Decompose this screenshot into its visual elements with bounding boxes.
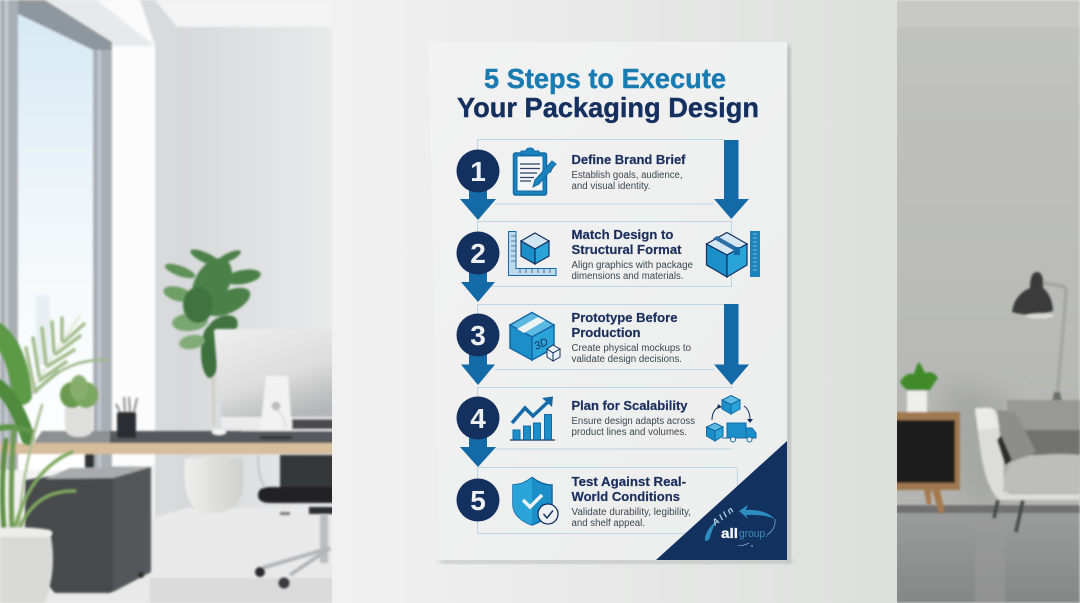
- floor lamp: [1012, 272, 1066, 402]
- icon: clipboard and pen: [514, 148, 556, 195]
- text: step 1: Define Brand Brief: [572, 152, 686, 167]
- window: [0, 0, 112, 470]
- arrow: step 2 down: [461, 270, 495, 302]
- desk with monitor and accessories: [0, 329, 334, 593]
- arrow: step 4 down: [460, 435, 496, 467]
- step number 4: [456, 396, 500, 440]
- corner triangle with logo: [656, 441, 787, 560]
- step number 1: 1: [470, 156, 486, 187]
- step number 1: [456, 150, 500, 192]
- text: step 4: Ensure design adapts across: [572, 416, 695, 427]
- step number 4: 4: [470, 403, 486, 434]
- icon: ruler and cube: [508, 232, 556, 276]
- text: step 1: Establish goals, audience,: [572, 170, 682, 181]
- grey sofa: [975, 400, 1080, 532]
- right lounge room background: [895, 0, 1080, 603]
- text: step 5: Validate durability, legibility,: [572, 507, 691, 518]
- step number 2: 2: [470, 238, 486, 269]
- step number 2: [456, 232, 500, 274]
- arrow: step 1 down: [460, 188, 496, 220]
- text: step 2: Structural Format: [572, 242, 682, 257]
- text: step 5: World Conditions: [572, 489, 680, 504]
- white floor planter: [185, 456, 244, 513]
- text: step 2: dimensions and materials.: [572, 271, 684, 282]
- panel: step 5: [456, 468, 738, 534]
- arrow: step 1 right: [714, 140, 749, 219]
- cabinet: [25, 467, 151, 593]
- text: step 3: validate design decisions.: [572, 354, 682, 365]
- title: 5 Steps to Execute: [484, 63, 726, 94]
- step number 5: 5: [470, 485, 486, 516]
- small plant on desk: [60, 375, 98, 437]
- text: step 4: [572, 398, 695, 438]
- logo: all group: group.: [739, 528, 768, 540]
- logo: all group: A I I n: [709, 505, 736, 528]
- icon: logistics cycle: [706, 396, 756, 442]
- step number 3: [456, 314, 500, 356]
- icon: growth chart: [510, 396, 555, 440]
- text: step 5: Test Against Real-: [572, 474, 686, 489]
- text: step 2: [572, 227, 693, 282]
- text: step 3: Production: [572, 325, 641, 340]
- icon: 3D box: [510, 312, 560, 361]
- text: step 3: Create physical mockups to: [572, 343, 691, 354]
- fern in pot: [0, 316, 108, 603]
- logo: all group: [705, 505, 775, 547]
- icon: shield with check: [513, 478, 558, 525]
- text: step 4: Plan for Scalability: [572, 398, 688, 413]
- title: Your Packaging Design: [457, 92, 759, 123]
- text: step 2: Align graphics with package: [572, 260, 693, 271]
- panel: step 2: [456, 222, 760, 302]
- icon: 3D box: 3D: [532, 336, 550, 353]
- panel: step 1: [456, 140, 749, 220]
- pen cup: [116, 397, 137, 438]
- arrow: step 3 down: [461, 352, 495, 385]
- step number 3: 3: [470, 320, 486, 351]
- desk top: [34, 431, 334, 443]
- office plant behind monitor: [162, 246, 262, 425]
- monitor: [214, 329, 334, 434]
- title: [457, 63, 759, 123]
- icon: taped box and ruler: [706, 231, 760, 277]
- text: step 1: [572, 152, 686, 192]
- text: step 5: [572, 474, 691, 529]
- office chair: [255, 455, 334, 588]
- poster shadow: [440, 559, 792, 564]
- poster: [428, 42, 787, 560]
- logo: all group: all: [721, 525, 738, 541]
- text: step 3: [572, 310, 691, 365]
- side cabinet with plant: [895, 362, 960, 513]
- text: step 1: and visual identity.: [572, 181, 650, 192]
- arrow: step 3 right: [714, 304, 749, 385]
- panel: step 3: [456, 304, 749, 385]
- text: step 3: Prototype Before: [572, 310, 678, 325]
- text: step 5: and shelf appeal.: [572, 518, 645, 529]
- text: step 2: Match Design to: [572, 227, 674, 242]
- feature wall: [332, 0, 897, 603]
- panel: step 4: [456, 388, 756, 467]
- text: step 4: product lines and volumes.: [572, 427, 687, 438]
- left office room background: [0, 0, 334, 603]
- step number 5: [456, 478, 500, 522]
